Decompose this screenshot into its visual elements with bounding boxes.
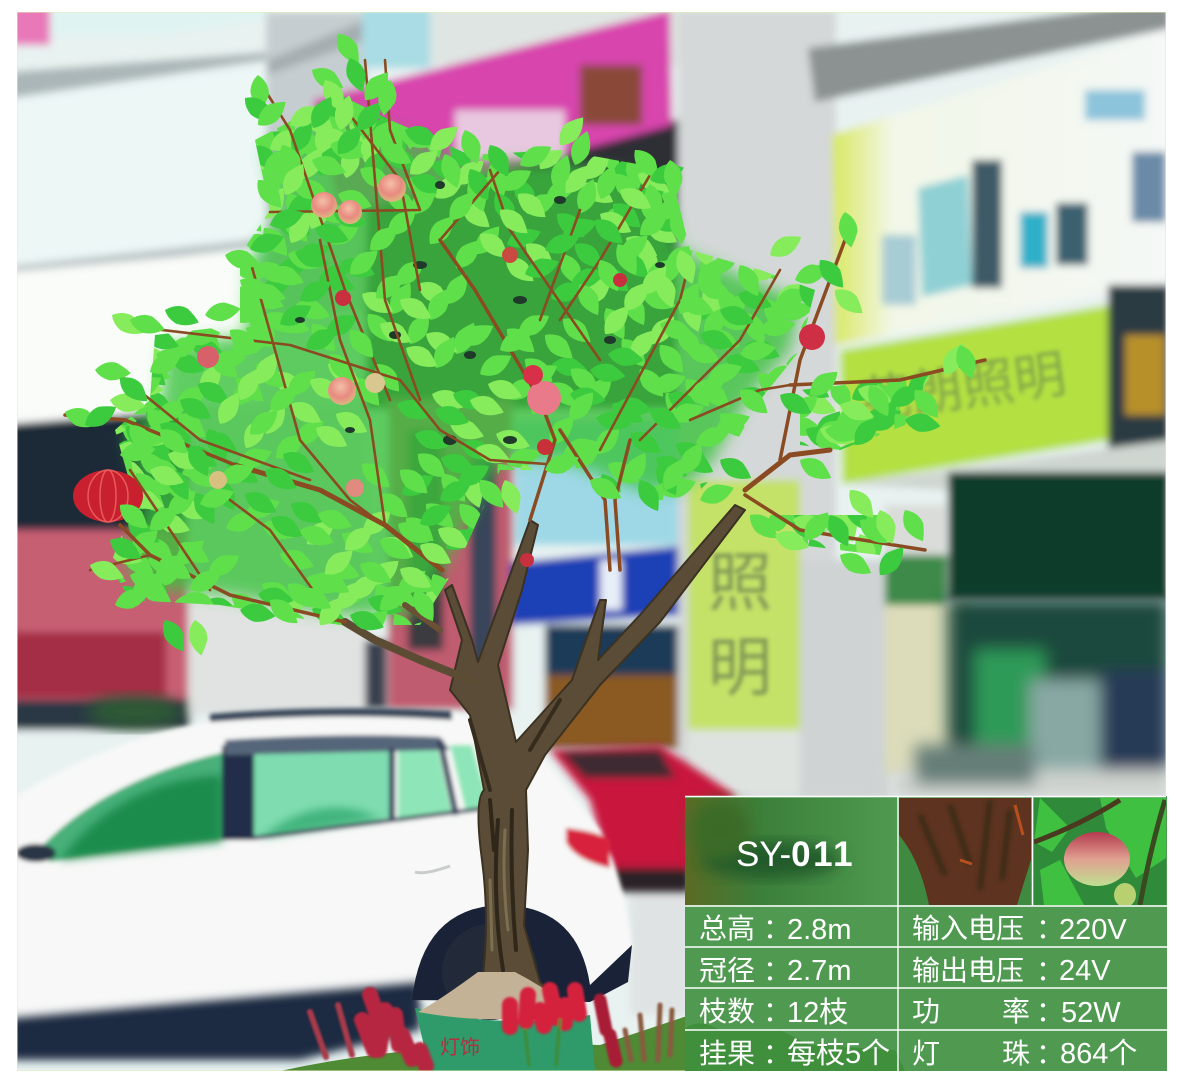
right spec column: [912, 907, 1137, 1072]
spec: input voltage: [912, 907, 1127, 947]
spec: input voltage: 输入电压: [912, 907, 1024, 947]
table lines: [685, 796, 1167, 1071]
spec: crown diameter: [699, 949, 851, 989]
spec: input voltage: ：: [1036, 907, 1064, 947]
spec: total height: ：: [763, 907, 791, 947]
spec: output voltage: [912, 949, 1111, 989]
spec: crown diameter: 冠径: [699, 949, 755, 989]
spec: power: 率: [1002, 990, 1030, 1030]
spec: fruit count: ：: [763, 1032, 791, 1072]
spec: total height: 2.8m: [787, 914, 851, 946]
tree branches: [65, 60, 985, 622]
red lantern: [73, 470, 143, 522]
grass strip in table corner: [685, 1023, 905, 1071]
spec: output voltage: 24V: [1059, 955, 1111, 987]
dense clipped leaf layers: [24, 13, 1007, 705]
model number cell: SY-011: [736, 835, 855, 874]
spec: total height: [699, 907, 851, 947]
tree trunk and main limbs: [345, 505, 745, 1020]
blurred red car: [550, 745, 735, 892]
model number cell: [685, 798, 897, 905]
blurred white car: [10, 708, 632, 1060]
left spec column: [699, 907, 890, 1072]
spec: lamp beads: 灯: [912, 1032, 940, 1072]
spec: power: 功: [912, 990, 940, 1030]
spec: power: ：: [1036, 990, 1064, 1030]
spec: lamp beads: 864个: [1060, 1038, 1137, 1070]
spec: fruit count: 每枝5个: [787, 1037, 890, 1070]
spec: branch count: 枝数: [699, 990, 755, 1030]
spec: fruit count: 挂果: [699, 1032, 755, 1072]
blurred text on vertical banner: 照: [708, 532, 772, 624]
tree leaves: [62, 29, 981, 657]
spec: crown diameter: ：: [763, 949, 791, 989]
spec: fruit count: [699, 1032, 890, 1072]
blurred text on vertical banner: [710, 551, 770, 698]
spec: total height: 总高: [699, 907, 755, 947]
spec: branch count: 12枝: [787, 996, 848, 1029]
trunk bark thumbnail: [899, 798, 1031, 905]
spec: power: [912, 990, 1121, 1030]
blurred text on vertical banner: 明: [708, 617, 772, 709]
spec: lamp beads: 珠: [1002, 1032, 1030, 1072]
blurred bush behind car: [87, 696, 183, 728]
spec: output voltage: ：: [1036, 949, 1064, 989]
grass at foot of planter: [280, 1015, 690, 1071]
apple thumbnail: [1034, 798, 1166, 907]
blurred text on green sign: 花朗照明: [854, 332, 1070, 435]
panel background: [685, 796, 1167, 1071]
blurred lower right shopfront: [890, 598, 1170, 800]
planter pot: 灯饰: [440, 1031, 480, 1060]
spec: power: 52W: [1061, 997, 1121, 1029]
spec: branch count: ：: [763, 990, 791, 1030]
apples on the tree: [197, 174, 825, 567]
red flowers and bushes: [310, 990, 672, 1066]
spec: lamp beads: [912, 1032, 1137, 1072]
specification panel: [685, 796, 1167, 1072]
spec: input voltage: 220V: [1059, 914, 1127, 946]
spec: output voltage: 输出电压: [912, 949, 1024, 989]
spec: lamp beads: ：: [1036, 1032, 1064, 1072]
crown foliage mass: [125, 105, 800, 615]
spec: branch count: [699, 990, 848, 1030]
spec: crown diameter: 2.7m: [787, 955, 851, 987]
dark gaps between leaves: [295, 181, 665, 445]
planter pot: [415, 972, 595, 1071]
